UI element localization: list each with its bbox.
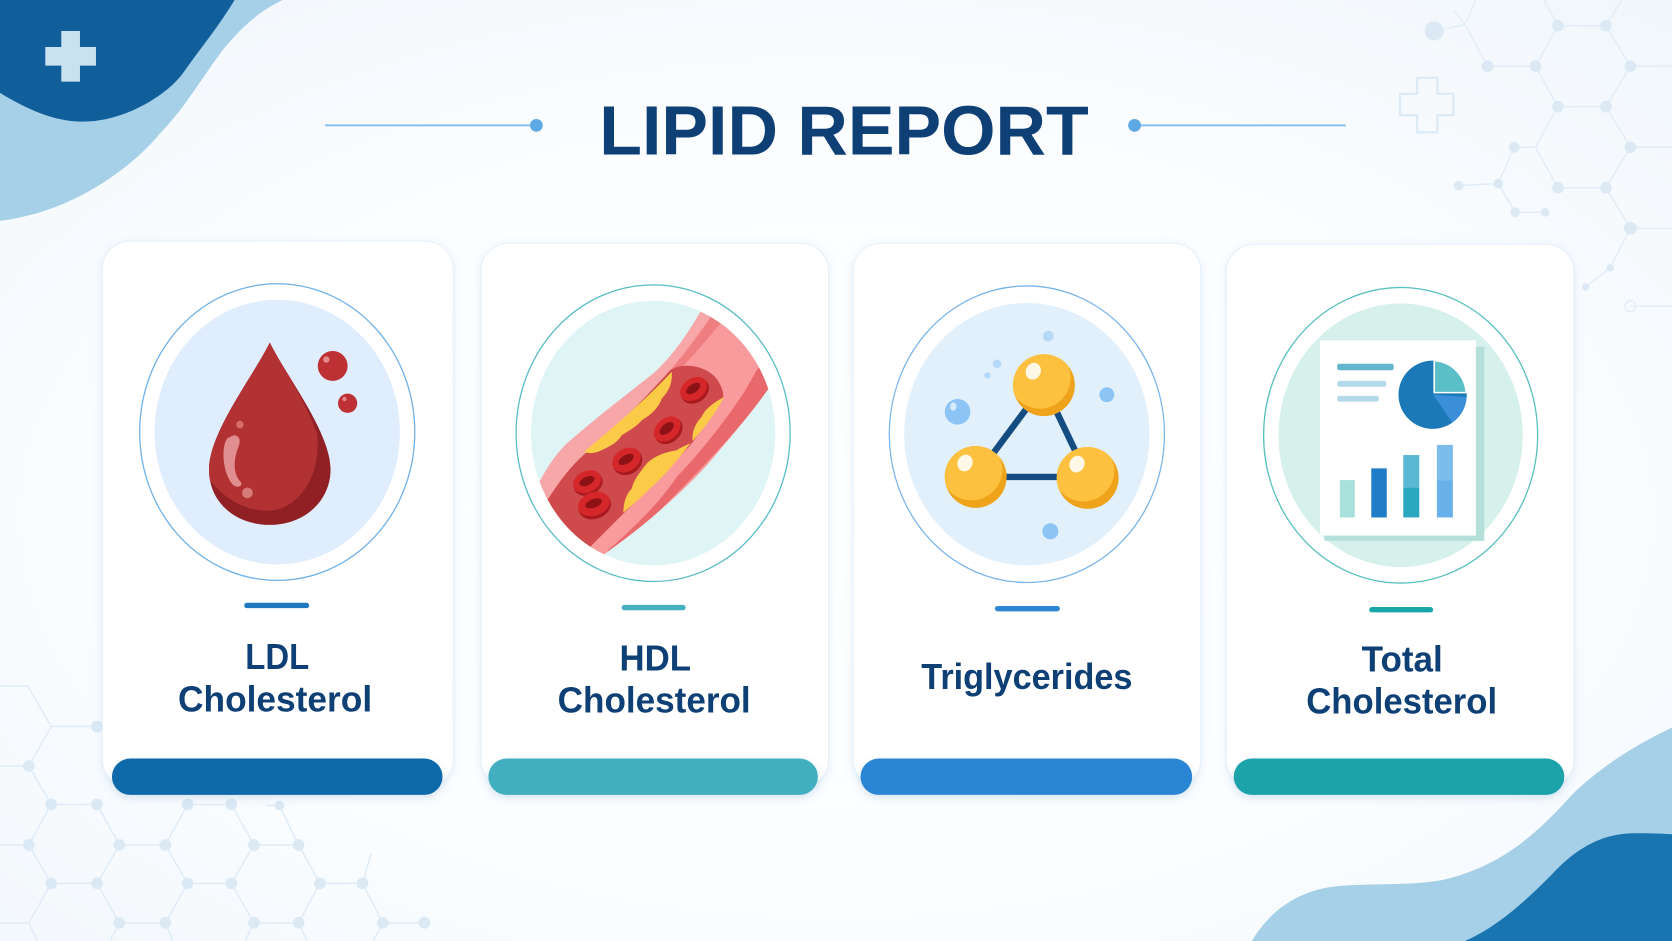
panel: HDL Cholesterol	[481, 243, 829, 795]
status pill	[1234, 759, 1564, 795]
right title rule	[1128, 119, 1346, 132]
icon: triglyceride molecule	[939, 331, 1126, 539]
top-left corner wave	[0, 0, 283, 221]
status pill	[861, 759, 1192, 795]
icon: report document with charts	[1320, 340, 1484, 541]
label: Cholesterol	[1306, 682, 1497, 722]
title text: LIPID REPORT	[599, 92, 1089, 170]
icon: outlined cross	[1400, 78, 1453, 132]
icon: blood drop	[203, 342, 357, 525]
status pill	[112, 759, 443, 795]
icon: medical cross	[45, 31, 96, 82]
accent bar	[244, 603, 309, 608]
accent bar	[1369, 607, 1433, 612]
label: Triglycerides	[921, 657, 1132, 697]
status pill	[488, 759, 818, 795]
bottom-right corner wave	[1252, 728, 1672, 941]
panel: Total Cholesterol	[1226, 244, 1574, 795]
molecular pattern: bottom left	[0, 686, 430, 941]
molecular pattern: top right	[1425, 0, 1672, 312]
label: Cholesterol	[558, 681, 751, 721]
accent bar	[622, 605, 686, 610]
panel: LDL Cholesterol	[102, 241, 453, 795]
accent bar	[995, 606, 1060, 611]
title with rules	[325, 92, 1346, 170]
left title rule	[325, 119, 543, 132]
panel: Triglycerides	[853, 243, 1201, 795]
label: HDL	[620, 639, 691, 679]
label: Cholesterol	[178, 680, 372, 720]
label: Total	[1362, 640, 1443, 680]
icon: artery with plaque	[540, 312, 768, 554]
label: LDL	[245, 637, 309, 677]
